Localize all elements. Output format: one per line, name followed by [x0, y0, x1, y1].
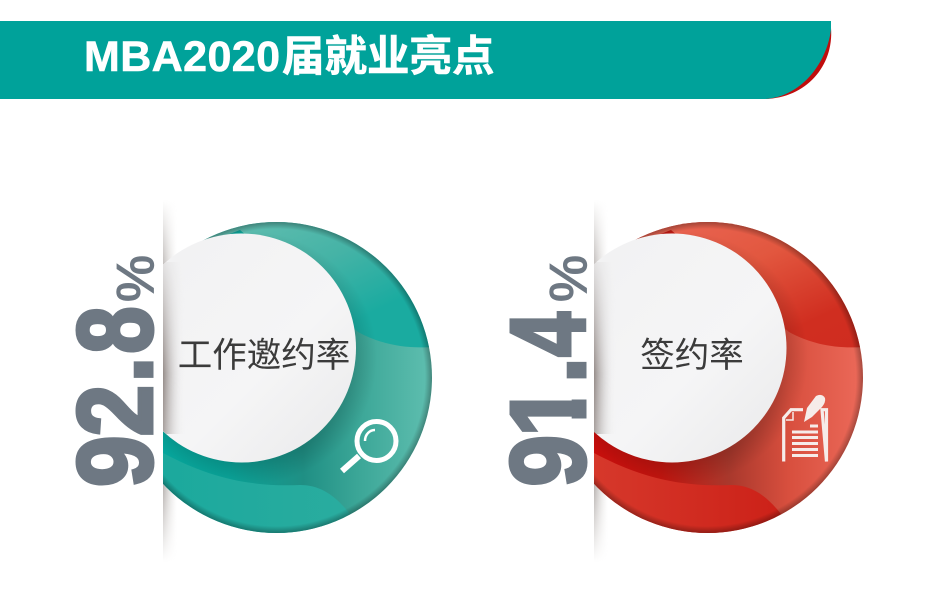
value 92.8%: . — [57, 357, 175, 382]
icon: document with pen — [784, 395, 826, 462]
value 92.8% — [57, 255, 175, 487]
banner teal shape — [0, 21, 831, 99]
value 91.4% — [489, 255, 608, 486]
white inner circle — [594, 234, 786, 462]
value 91.4%: 4 — [489, 312, 607, 357]
value 91.4%: 9 — [490, 435, 608, 486]
white inner circle — [163, 234, 356, 462]
value 91.4%: . — [490, 357, 608, 383]
label: 签约率 — [640, 337, 744, 375]
teal disc — [163, 222, 432, 533]
title: MBA2020 — [84, 33, 280, 81]
value 92.8%: 8 — [57, 306, 175, 354]
value 91.4%: % — [540, 255, 598, 302]
fold shadow strip — [163, 208, 174, 554]
value 92.8%: 2 — [57, 385, 175, 436]
red disc — [594, 222, 863, 533]
fold shadow strip — [594, 208, 605, 554]
banner red crescent — [765, 28, 831, 99]
icon: magnifier — [342, 422, 396, 471]
value 91.4%: 1 — [490, 385, 608, 436]
value 92.8%: 9 — [57, 436, 175, 487]
label: 工作邀约率 — [178, 337, 350, 375]
value 92.8%: % — [107, 255, 165, 302]
panel: signing rate — [489, 200, 864, 562]
panel: job offer rate — [57, 200, 433, 562]
title banner — [0, 21, 831, 99]
title: 届就业亮点 — [282, 34, 495, 81]
foot masks for the digit 1 — [570, 384, 589, 436]
